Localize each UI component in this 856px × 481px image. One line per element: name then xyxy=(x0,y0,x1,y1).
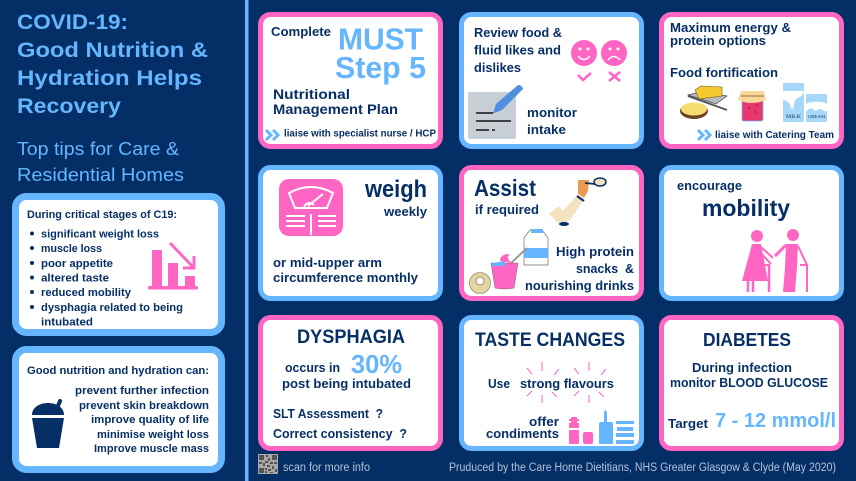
text: review food likes: fluid likes and xyxy=(474,44,561,58)
benefits list xyxy=(75,385,209,455)
icon: nourishing drink cup xyxy=(491,254,518,289)
text: nutritional management plan xyxy=(273,86,398,117)
symptom list: poor appetite xyxy=(41,258,113,270)
panel: assist and snacks xyxy=(462,168,642,298)
text: monitor blood glucose: During infection xyxy=(692,361,792,375)
panel: weigh weekly xyxy=(260,168,440,298)
heading: diabetes: DIABETES xyxy=(703,330,791,350)
icon: weighing scale xyxy=(279,179,343,236)
benefits list: improve quality of life xyxy=(91,414,209,426)
symptom list: dysphagia related to being xyxy=(41,302,183,314)
text: weigh: weigh xyxy=(364,176,427,203)
icon: sad face with cross xyxy=(601,40,627,81)
text: liaise with catering team: liaise with Catering Team xyxy=(715,129,834,141)
text: review food likes xyxy=(474,26,562,75)
panel: benefits of good nutrition xyxy=(16,350,222,470)
sidebar subtitle xyxy=(17,139,184,185)
text: offer condiments: offer xyxy=(529,415,559,429)
text: high protein snacks: nourishing drinks xyxy=(525,279,634,293)
heading: MUST Step 5: Step 5 xyxy=(335,50,426,85)
text: assessment questions: SLT Assessment ? xyxy=(273,407,383,421)
text: post being intubated: post being intubated xyxy=(282,376,411,391)
icon: jam jar xyxy=(738,91,766,121)
benefits list: minimise weight loss xyxy=(97,429,209,441)
text: use strong flavours: strong flavours xyxy=(520,377,614,391)
text: target: Target xyxy=(668,417,709,431)
panel: energy and protein options xyxy=(662,14,842,146)
icon: happy face with tick xyxy=(571,40,597,80)
icon: chevrons xyxy=(266,130,278,140)
text: nutritional management plan: Management Plan xyxy=(273,101,398,117)
benefits list: prevent further infection xyxy=(75,385,209,397)
text: nutritional management plan: Nutritional xyxy=(273,86,350,102)
icon: two people walking xyxy=(742,229,808,292)
text: mid-upper arm circumference xyxy=(273,256,418,285)
text: monitor blood glucose xyxy=(670,361,828,390)
icon: declining bar chart xyxy=(148,243,198,290)
QR code xyxy=(258,454,278,474)
caption: scan for more info: scan for more info xyxy=(283,462,370,474)
sidebar title: Hydration Helps xyxy=(17,67,202,90)
icon: flavour bursts xyxy=(527,362,606,403)
sidebar subtitle: Top tips for Care & xyxy=(17,139,179,159)
symptom list: intubated xyxy=(41,316,93,328)
text: mid-upper arm circumference: circumference monthly xyxy=(273,271,418,285)
symptom list: muscle loss xyxy=(41,243,102,255)
panel: review likes and monitor intake xyxy=(462,14,642,146)
sidebar title: Recovery xyxy=(17,95,121,118)
text: assessment questions: Correct consistency ? xyxy=(273,427,407,441)
text: assist: Assist xyxy=(474,175,536,201)
icon: milk carton xyxy=(510,229,548,265)
text: mobility: mobility xyxy=(702,195,790,221)
icon: milk and cream cartons: CREAM xyxy=(808,114,826,119)
text: review food likes: Review food & xyxy=(474,26,562,40)
stat: 30%: 30% xyxy=(351,349,402,379)
text: high protein snacks xyxy=(525,245,634,293)
stat: target range: 7 - 12 mmol/l xyxy=(715,410,836,432)
panel: critical stages of C19 xyxy=(16,196,222,332)
text: high protein snacks: High protein xyxy=(556,245,634,259)
symptom list: reduced mobility xyxy=(41,287,132,299)
sidebar title: COVID-19: xyxy=(17,11,128,34)
text: offer condiments xyxy=(486,415,559,441)
icon: milk and cream cartons xyxy=(783,83,827,122)
panel heading: good nutrition can: Good nutrition and hydration can: xyxy=(27,365,209,377)
heading: MUST Step 5 xyxy=(335,22,426,85)
symptom list: altered taste xyxy=(41,272,109,284)
heading: MUST Step 5: MUST xyxy=(338,22,423,56)
text: use strong flavours: Use xyxy=(488,377,510,391)
text: maximum energy xyxy=(670,20,791,48)
text: liaise with specialist nurse: liaise with specialist nurse / HCP xyxy=(284,128,436,140)
symptom list: significant weight loss xyxy=(41,228,159,240)
text: monitor blood glucose: monitor BLOOD GLUCOSE xyxy=(670,376,828,390)
text: if required: if required xyxy=(475,203,539,217)
panel: MUST step 5 xyxy=(260,14,440,146)
text: monitor intake xyxy=(527,106,577,137)
icon: notepad and pen xyxy=(468,85,523,139)
icon: chevrons xyxy=(698,130,710,140)
panel: taste changes xyxy=(462,318,642,448)
text: food fortification: Food fortification xyxy=(670,65,778,80)
text: monitor intake: intake xyxy=(527,123,566,137)
text: high protein snacks: snacks & xyxy=(576,262,634,276)
panel: diabetes xyxy=(662,318,842,448)
icon: biscuit xyxy=(470,272,490,294)
text: encourage: encourage xyxy=(677,179,742,193)
text: maximum energy: Maximum energy & xyxy=(670,20,791,35)
symptom list xyxy=(30,228,183,328)
text: assessment questions xyxy=(273,407,407,441)
benefits list: Improve muscle mass xyxy=(94,443,209,455)
icon: milk and cream cartons: MILK xyxy=(786,115,801,120)
panel: encourage mobility xyxy=(662,168,842,298)
text: weekly: weekly xyxy=(383,204,428,219)
panel: dysphagia xyxy=(260,318,440,448)
icon: hand with spoon xyxy=(549,178,606,226)
heading: dysphagia: DYSPHAGIA xyxy=(297,327,405,348)
icon: butter and bread xyxy=(680,86,727,119)
heading: taste changes: TASTE CHANGES xyxy=(475,330,625,351)
text: offer condiments: condiments xyxy=(486,427,559,441)
sidebar subtitle: Residential Homes xyxy=(17,165,184,185)
panel heading: during critical stages: During critical stages of C19: xyxy=(27,209,177,221)
text: monitor intake: monitor xyxy=(527,106,577,120)
text: complete: Complete xyxy=(271,24,331,39)
text: occurs in: occurs in xyxy=(285,361,340,375)
text: maximum energy: protein options xyxy=(670,33,766,48)
sidebar title: Good Nutrition & xyxy=(17,39,208,62)
benefits list: prevent skin breakdown xyxy=(79,400,209,412)
icon: dessert cup xyxy=(32,401,64,448)
text: mid-upper arm circumference: or mid-upper arm xyxy=(273,256,382,270)
icon: condiment bottles xyxy=(569,410,634,444)
text: review food likes: dislikes xyxy=(474,61,521,75)
sidebar title xyxy=(17,11,208,118)
